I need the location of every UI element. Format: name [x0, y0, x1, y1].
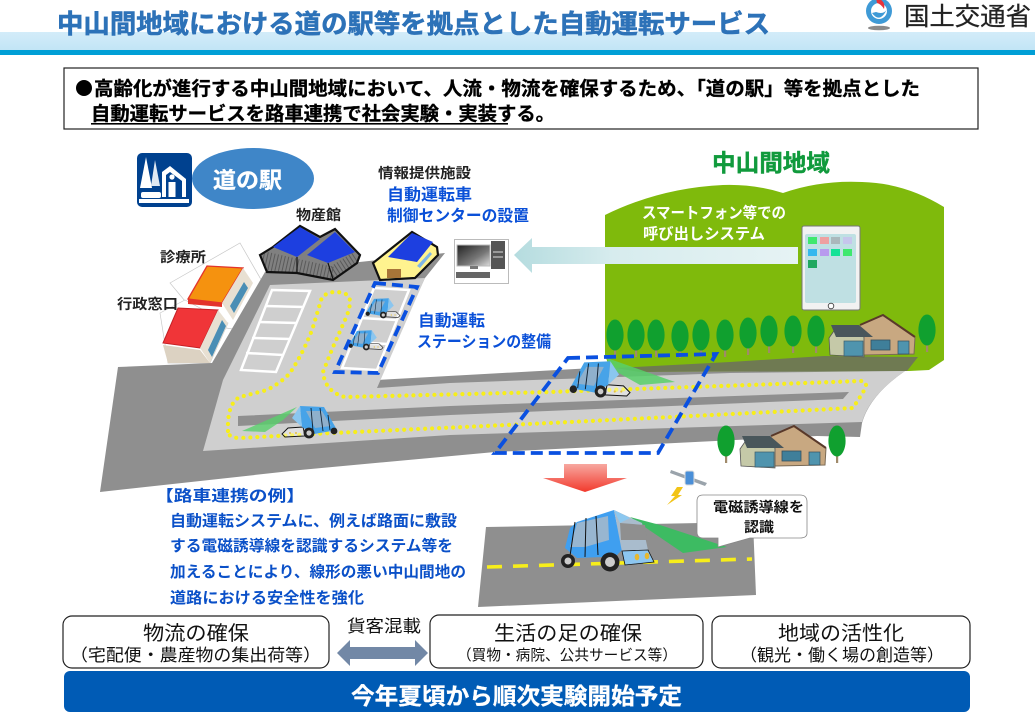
labels: facilities: 物産館: [296, 207, 341, 223]
parking bays left: [241, 290, 310, 372]
down arrow: [543, 464, 627, 492]
logo: ministry mark and name: 国土交通省: [904, 3, 1031, 31]
label: control center: 自動運転車: [387, 185, 472, 204]
michi-no-eki badge: [137, 148, 314, 209]
text: smartphone call system: [642, 203, 786, 243]
sensor beam: [630, 517, 727, 553]
building: souvenir hall: [260, 226, 360, 280]
box: regional revitalization: （観光・働く場の創造等）: [740, 646, 944, 665]
dashed area: road section: [495, 354, 716, 453]
dashed area: station: [335, 283, 417, 373]
label: station: 自動運転: [418, 311, 485, 330]
summary statement box: 自動運転サービスを路車連携で社会実験・実装する。: [91, 103, 555, 125]
house below road: [717, 426, 846, 468]
mountain region green hill: [605, 182, 944, 372]
house by hill: [829, 315, 915, 357]
heading: mountain region: 中山間地域: [712, 150, 831, 176]
box: logistics: 物流の確保: [143, 622, 249, 645]
box: daily transport: [430, 615, 703, 668]
label: mixed passenger and freight: 貨客混載: [347, 617, 421, 636]
vehicle: road at left with sensor beam: [242, 406, 337, 438]
labels: facilities: [117, 165, 471, 312]
speech bubble: 認識: [744, 519, 774, 535]
banner: schedule: 今年夏頃から順次実験開始予定: [351, 683, 682, 709]
vehicle: station two: [349, 330, 383, 350]
building: clinic: [188, 266, 253, 320]
parking bays right: [342, 288, 409, 370]
box: daily transport: 生活の足の確保: [494, 622, 642, 645]
close-up road scene: [478, 522, 756, 607]
text: smartphone call system: スマートフォン等での: [642, 203, 786, 222]
header band: [0, 32, 1035, 55]
tablet with apps: [802, 226, 860, 310]
banner: schedule: [64, 671, 970, 712]
label: control center: [387, 185, 529, 225]
road and parking lot: [100, 253, 918, 492]
vehicle: road at right with sensor beam: [570, 358, 675, 398]
box: daily transport: （買物・病院、公共サービス等）: [457, 646, 677, 664]
logo: ministry mark and name: [866, 0, 1031, 31]
call arrow from tablet to computer: [514, 238, 798, 273]
text: smartphone call system: 呼び出しシステム: [643, 225, 765, 243]
labels: facilities: 行政窓口: [117, 296, 178, 312]
faint building plots: [160, 243, 267, 363]
box: regional revitalization: 地域の活性化: [778, 622, 904, 645]
michi-no-eki badge: 道の駅: [213, 168, 282, 193]
road-vehicle example text: [155, 486, 466, 607]
satellite icon: [667, 470, 707, 505]
road-vehicle example text: 自動運転システムに、例えば路面に敷設: [170, 511, 458, 530]
speech bubble: 電磁誘導線を: [713, 499, 804, 515]
summary statement box: [64, 68, 978, 129]
computer icon: [454, 240, 508, 284]
building: administrative counter: [163, 308, 228, 363]
label: station: [417, 311, 551, 351]
labels: facilities: 診療所: [160, 249, 206, 265]
road-vehicle example text: 道路における安全性を強化: [170, 588, 365, 607]
road-vehicle example text: する電磁誘導線を認識するシステム等を: [170, 536, 453, 555]
road-vehicle example text: 加えることにより、線形の悪い中山間地の: [170, 562, 466, 581]
title: 中山間地域における道の駅等を拠点とした自動運転サービス: [57, 9, 770, 39]
building: information facility: [373, 232, 438, 280]
speech bubble: [697, 495, 807, 547]
labels: facilities: 情報提供施設: [378, 165, 471, 181]
box: regional revitalization: [712, 616, 970, 668]
autonomous route dotted line: [228, 292, 866, 438]
summary statement box: 高齢化が進行する中山間地域において、人流・物流を確保するため、「道の駅」等を拠点とした: [94, 77, 920, 100]
label: control center: 制御センターの設置: [387, 207, 529, 225]
box: logistics: [63, 616, 329, 668]
label: station: ステーションの整備: [417, 333, 551, 351]
close-up bus: [561, 510, 654, 572]
double arrow: [337, 640, 428, 666]
box: logistics: （宅配便・農産物の集出荷等）: [70, 646, 321, 665]
road-vehicle example text: 【路車連携の例】: [155, 486, 305, 505]
trees row: [606, 314, 936, 358]
vehicle: station one: [366, 298, 400, 318]
